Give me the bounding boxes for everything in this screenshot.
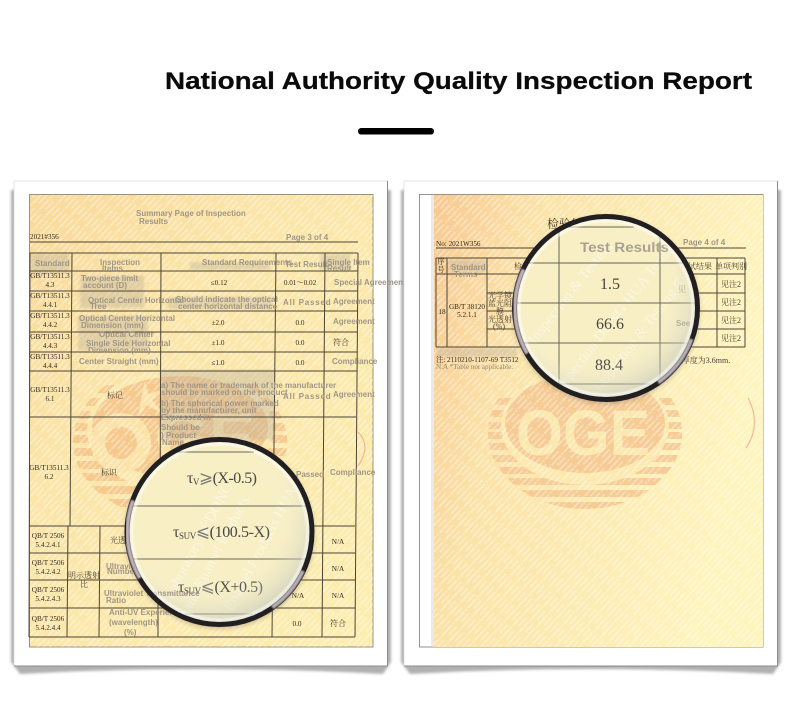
requirement and result values (104, 258, 406, 628)
requirement and result values: 0.0 (296, 339, 305, 347)
lens contents: 1.5 (600, 276, 620, 293)
inspection item labels: Optical Center Horizontal (88, 296, 184, 305)
right inspection table (436, 257, 747, 371)
standard column labels: 6.2 (45, 473, 54, 481)
inspection item labels: Dimension (mm) (81, 321, 144, 330)
standard column labels: QB/T 2506 (32, 615, 65, 623)
left report number and page: 2021#356 (30, 233, 59, 241)
inspection item labels: 比 (80, 579, 88, 589)
lens contents: Enamel Products HUA (221, 484, 301, 614)
inspection item labels: Number (107, 567, 137, 576)
requirement and result values: N/A (292, 592, 305, 600)
lens contents: Inspection & Testing (526, 238, 616, 347)
standard column labels (29, 259, 70, 632)
lens contents: (100.5-X) (210, 524, 270, 541)
lens contents: and Enamel Products (179, 494, 253, 614)
standard column labels: GB/T13511.3 (29, 464, 69, 472)
inspection item labels: 标识 (101, 467, 118, 477)
lens contents: See (676, 319, 691, 328)
requirement and result values: Passed (296, 470, 324, 479)
requirement and result values: by the manufacturer, unit (161, 406, 257, 415)
inspection item labels: Tree (90, 302, 107, 311)
standard column labels: GB/T13511.3 (30, 312, 70, 320)
inspection item labels: Optical Center (99, 330, 154, 339)
standard column labels: QB/T 2506 (32, 586, 65, 594)
left report number and page: Page 3 of 4 (286, 233, 329, 242)
lens contents: Inspection DONG HUA Testing (551, 236, 682, 397)
requirement and result values: Ratio (106, 596, 126, 605)
standard column labels: 4.4.1 (43, 301, 58, 309)
title: National Authority Quality Inspection Report (165, 68, 752, 95)
lens contents: Ultraviolet Transmittance (104, 589, 200, 598)
requirement and result values: ≤1.0 (212, 359, 225, 367)
requirement and result values: Standard Requirements (202, 258, 293, 267)
lens contents: ⩽ (196, 522, 210, 541)
lens contents: Laboratory of DONG (161, 479, 237, 602)
requirement and result values: center horizontal distance (178, 302, 278, 311)
right table text: 见注2 (721, 279, 741, 289)
standard column labels: 5.4.2.4.1 (35, 541, 61, 549)
lens contents: τ (178, 579, 184, 596)
standard column labels: 4.4.4 (43, 362, 58, 370)
right report number: No: 2021W356 (436, 240, 481, 248)
requirement and result values: Compliance (332, 357, 378, 366)
inspection item labels: 光透 (110, 535, 126, 545)
standard column labels: Standard (35, 259, 70, 268)
requirement and result values: 0.0 (293, 620, 302, 628)
right table text: 试结果 (688, 261, 712, 271)
right table text: N.A *Table not applicable. (436, 363, 513, 371)
requirement and result values: All Passed (283, 298, 331, 307)
requirement and result values: Agreement (333, 390, 375, 399)
right table text: Standard (451, 263, 486, 272)
requirement and result values: should be marked on the product (161, 388, 288, 397)
right table text: 厚度为3.6mm. (682, 355, 730, 365)
lens contents: 见 (678, 284, 686, 294)
lens contents: 66.6 (596, 316, 624, 333)
left inspection table (29, 253, 406, 637)
standard column labels: GB/T13511.3 (30, 292, 70, 300)
right table text: 18 (438, 308, 446, 316)
lens contents: Test Results (580, 240, 669, 255)
magnifier lens: right (512, 216, 700, 404)
right document sheet (420, 194, 763, 647)
inspection item labels: Optical Center Horizontal (79, 314, 175, 323)
lens contents: SUV (184, 586, 202, 596)
inspection item labels (68, 258, 184, 637)
requirement and result values: ≤0.12 (211, 279, 228, 287)
requirement and result values: a) The name or trademark of the manufacturer (161, 381, 336, 390)
requirement and result values: N/A (332, 592, 345, 600)
lens contents (133, 452, 310, 622)
lens contents: SUV (179, 531, 197, 541)
right table text: 注: 2110210-1107-69 T3512 (436, 355, 519, 364)
standard column labels: GB/T13511.3 (30, 386, 70, 394)
lens contents: τ (187, 470, 193, 487)
lens contents: τ (173, 524, 179, 541)
requirement and result values: N/A (332, 565, 345, 573)
inspection item labels: Ultraviolet (106, 562, 145, 571)
lens contents: (X-0.5) (213, 470, 257, 487)
requirement and result values: All Passed (283, 392, 331, 401)
standard column labels: GB/T13511.3 (30, 272, 70, 280)
inspection item labels: Center Straight (mm) (79, 357, 159, 366)
requirement and result values: Name (162, 438, 184, 447)
inspection item labels: account (D) (83, 281, 127, 290)
requirement and result values: 0.01～0.02 (284, 279, 317, 287)
right table text: 检 (514, 261, 522, 271)
standard column labels: 4.4.2 (43, 321, 58, 329)
requirement and result values: Expressed in (161, 413, 211, 422)
right watermark logo: OGE (516, 397, 650, 469)
lens contents: ⩾ (199, 468, 213, 487)
requirement and result values: Ultraviolet Transmittance (104, 589, 200, 598)
right table text (436, 257, 747, 371)
left watermark logo: GE (155, 399, 255, 477)
requirement and result values: Single Item (327, 258, 370, 267)
magnifier lens: left (104, 439, 314, 629)
requirement and result values: ±2.0 (212, 319, 225, 327)
standard column labels: 5.4.2.4.4 (35, 624, 61, 632)
standard column labels: 5.4.2.4.3 (35, 595, 61, 603)
title underline bar (358, 128, 434, 134)
right table text: Terms (454, 270, 478, 279)
right report number: Page 4 of 4 (683, 238, 726, 247)
requirement and result values: Should indicate the optical (176, 295, 278, 304)
right table text: 见注2 (721, 333, 741, 343)
inspection item labels: Two-piece limit (81, 274, 139, 283)
left report heading: Summary Page of Inspection (136, 209, 246, 218)
right table text: 见注2 (721, 297, 741, 307)
right watermark logo (488, 380, 682, 509)
lens contents (516, 219, 695, 397)
right table text: 序 (437, 257, 445, 266)
right table text: 光学镜片 (488, 290, 520, 300)
panel: right report card (401, 181, 781, 674)
panel: left report card (11, 181, 406, 674)
lens contents: ⩽ (201, 577, 215, 596)
requirement and result values: Compliance (330, 468, 376, 477)
requirement and result values: 0.0 (296, 359, 305, 367)
standard column labels: 6.1 (46, 395, 55, 403)
requirement and result values: 符合 (333, 337, 349, 347)
requirement and result values: ±1.0 (212, 339, 225, 347)
requirement and result values: 0.0 (296, 319, 305, 327)
lens contents: V (193, 477, 200, 487)
standard column labels: GB/T13511.3 (30, 353, 70, 361)
standard column labels: 4.3 (46, 281, 55, 289)
standard column labels: 4.4.3 (43, 342, 58, 350)
left report heading: Results (139, 217, 168, 226)
right table text: 单项判别 (715, 261, 747, 271)
inspection item labels: Inspection (100, 258, 140, 267)
right table text: 膜 (496, 306, 504, 316)
right table text: 蓝光阻挡 (488, 298, 520, 308)
requirement and result values: Agreement (333, 297, 375, 306)
lens contents: 88.4 (595, 357, 623, 374)
lens contents: Inspection & Testing C (591, 275, 689, 394)
requirement and result values: Should be (161, 423, 200, 432)
requirement and result values: Test Result (285, 260, 328, 269)
requirement and result values: 符合 (330, 618, 346, 628)
inspection item labels: Dimension (mm) (88, 346, 151, 355)
requirement and result values: Special Agreement (334, 278, 406, 287)
inspection item labels: 标记 (107, 390, 123, 400)
right table text: GB/T 38120 (449, 303, 485, 311)
right report number (436, 238, 746, 248)
inspection item labels: Items (102, 264, 123, 273)
requirement and result values: N/A (332, 538, 345, 546)
right table text: (%) (493, 322, 505, 331)
left report heading (136, 209, 246, 226)
right table text: 5.2.1.1 (457, 311, 477, 319)
standard column labels: 5.4.2.4.2 (35, 568, 61, 576)
left watermark logo (73, 376, 287, 507)
standard column labels: QB/T 2506 (32, 532, 65, 540)
right table text: 号 (437, 265, 445, 274)
inspection item labels: (wavelength) (109, 618, 158, 627)
requirement and result values: Result (327, 264, 352, 273)
left stamp (358, 432, 365, 466)
left document sheet (30, 194, 373, 647)
right table text: 光透射比 (488, 314, 520, 324)
requirement and result values: b) The spherical power marked (161, 399, 279, 408)
inspection item labels: 明示透射 (68, 570, 100, 580)
requirement and result values: Agreement (333, 317, 375, 326)
standard column labels: GB/T13511.3 (30, 333, 70, 341)
standard column labels: QB/T 2506 (32, 559, 65, 567)
right report heading: 检验结果 (547, 216, 595, 231)
inspection item labels: Single Side Horizontal (86, 339, 170, 348)
inspection item labels: Anti-UV Experience (109, 608, 184, 617)
lens contents: (X+0.5) (214, 579, 263, 596)
requirement and result values: ) Product (161, 431, 196, 440)
right stamp (746, 398, 755, 448)
inspection item labels: (%) (124, 628, 137, 637)
right table text: 见注2 (721, 315, 741, 325)
left report number and page (30, 233, 358, 242)
